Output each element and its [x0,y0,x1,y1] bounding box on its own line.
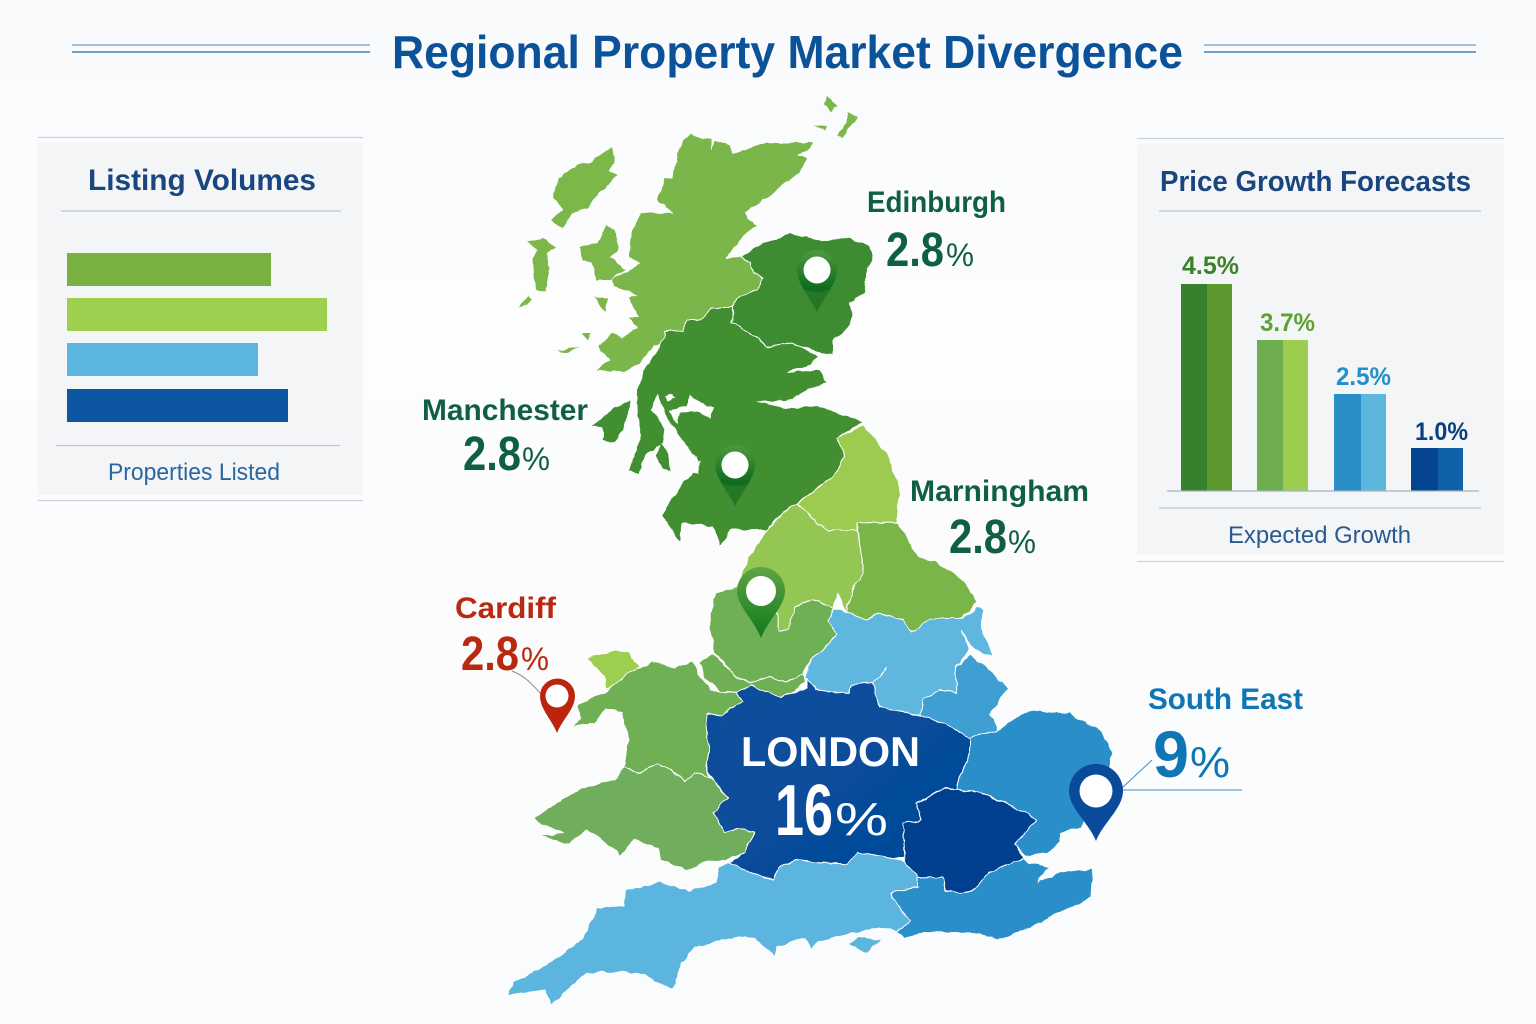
pin: edinburgh [797,250,837,312]
region: cheshire band [700,653,806,697]
label: marningham [910,475,1089,564]
panel: price growth forecasts [1137,138,1504,562]
bar chart: price growth: 3.7% [1260,309,1315,337]
region: scottish islands [592,400,670,470]
label: cardiff: 2.8 [461,628,519,681]
region: highlands [595,133,815,373]
bar chart: price growth [1167,252,1479,491]
region: yorkshire [846,522,978,632]
region: north wales [571,662,743,782]
label: marningham: % [1008,524,1036,560]
region: south east coast [891,858,1093,940]
panel: listing volumes [38,138,363,500]
bar chart: price growth: 2.5% [1336,363,1391,391]
region: london main [706,678,970,880]
label: cardiff [455,592,557,681]
label: manchester: Manchester [422,394,588,427]
pin: marningham [737,567,785,638]
label: london: 16 [775,771,833,851]
region: north west england [737,503,864,630]
label: manchester [422,394,588,481]
label: edinburgh: 2.8 [886,224,944,277]
bar chart: listing volumes [67,253,327,422]
label: cardiff: Cardiff [455,592,557,625]
pin: manchester [715,445,755,506]
pin: cardiff with leader [512,671,575,733]
label: south east: 9 [1153,717,1189,791]
region: home counties dark [903,788,1037,893]
caption: properties listed: Properties Listed [108,459,280,486]
region: south wales [532,763,755,870]
label: marningham: Marningham [910,475,1089,508]
label: edinburgh [867,186,1006,277]
label: south east [1148,683,1303,791]
region: west midlands [709,587,838,683]
label: edinburgh: % [946,237,974,273]
label: london: % [835,793,888,845]
label: london: LONDON [741,728,920,775]
region: isle of wight [848,937,881,953]
bar chart: price growth: 4.5% [1182,252,1239,280]
region: northern isles and western isles [518,97,858,353]
pin: south east with leader [1069,760,1242,841]
boundary: east midlands inner [873,667,886,682]
title: Regional Property Market Divergence [392,26,1183,78]
region: east anglia north [921,655,1008,738]
label: manchester: 2.8 [463,428,521,481]
region: south west [508,852,917,1005]
region: east midlands [806,607,994,715]
label: south east: % [1190,738,1230,787]
label: cardiff: % [521,641,549,677]
region: north east england [797,425,900,530]
region: edinburgh east scotland [732,233,873,355]
label: london [741,728,920,851]
caption: expected growth: Expected Growth [1228,522,1411,549]
label: marningham: 2.8 [949,511,1007,564]
label: south east: South East [1148,683,1303,716]
label: edinburgh: Edinburgh [867,186,1006,219]
region: essex and east [957,710,1113,857]
region: anglesey [586,650,640,688]
region: central and southern scotland [628,307,863,547]
region: clyde lochs [665,394,713,474]
panel heading: price growth forecasts: Price Growth Forecasts [1160,166,1471,198]
label: manchester: % [522,441,550,477]
panel heading: listing volumes: Listing Volumes [88,164,316,197]
map of UK regions [508,97,1113,1005]
bar chart: price growth: 1.0% [1415,418,1468,446]
